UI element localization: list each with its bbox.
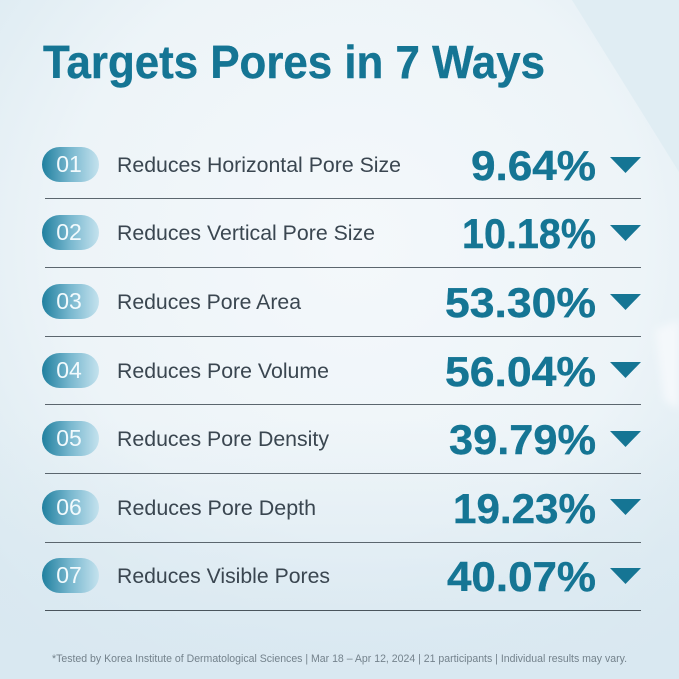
value 4: 56.04%	[445, 348, 596, 395]
value 5: 39.79%	[449, 416, 596, 463]
label 1: Reduces Horizontal Pore Size	[117, 153, 401, 177]
number pill 03	[42, 284, 99, 319]
number pill 01: 01	[56, 151, 82, 177]
number pill 06	[42, 490, 99, 525]
list row 3	[42, 279, 641, 336]
list row 4	[42, 348, 641, 404]
title: Targets Pores in 7 Ways	[43, 36, 545, 88]
number pill 05	[42, 421, 99, 456]
value 2: 10.18%	[462, 210, 596, 257]
label 4: Reduces Pore Volume	[117, 359, 329, 383]
value 3: 53.30%	[445, 279, 596, 326]
list row 2	[42, 210, 641, 268]
number pill 01	[42, 147, 99, 182]
down arrow 1	[610, 157, 641, 173]
number pill 02: 02	[56, 219, 82, 245]
down arrow 4	[610, 362, 641, 378]
number pill 03: 03	[56, 288, 82, 314]
label 2: Reduces Vertical Pore Size	[117, 221, 375, 245]
number pill 05: 05	[56, 425, 82, 451]
down arrow 7	[610, 568, 641, 584]
footnote: *Tested by Korea Institute of Dermatological Sciences | Mar 18 – Apr 12, 2024 | 21 participants | Individual results may vary.	[52, 653, 627, 665]
number pill 07: 07	[56, 562, 82, 588]
down arrow 3	[610, 294, 641, 310]
list row 6	[42, 485, 641, 542]
number pill 06: 06	[56, 494, 82, 520]
value 6: 19.23%	[453, 485, 596, 532]
value 1: 9.64%	[471, 142, 596, 189]
number pill 04: 04	[56, 357, 82, 383]
down arrow 2	[610, 225, 641, 241]
down arrow 6	[610, 499, 641, 515]
number pill 04	[42, 353, 99, 388]
label 6: Reduces Pore Depth	[117, 496, 316, 520]
list row 1	[42, 142, 641, 198]
down arrow 5	[610, 431, 641, 447]
label 7: Reduces Visible Pores	[117, 564, 330, 588]
number pill 07	[42, 558, 99, 593]
label 5: Reduces Pore Density	[117, 427, 329, 451]
list row 5	[42, 416, 641, 474]
value 7: 40.07%	[447, 553, 596, 600]
number pill 02	[42, 215, 99, 250]
list row 7	[42, 553, 641, 610]
label 3: Reduces Pore Area	[117, 290, 301, 314]
